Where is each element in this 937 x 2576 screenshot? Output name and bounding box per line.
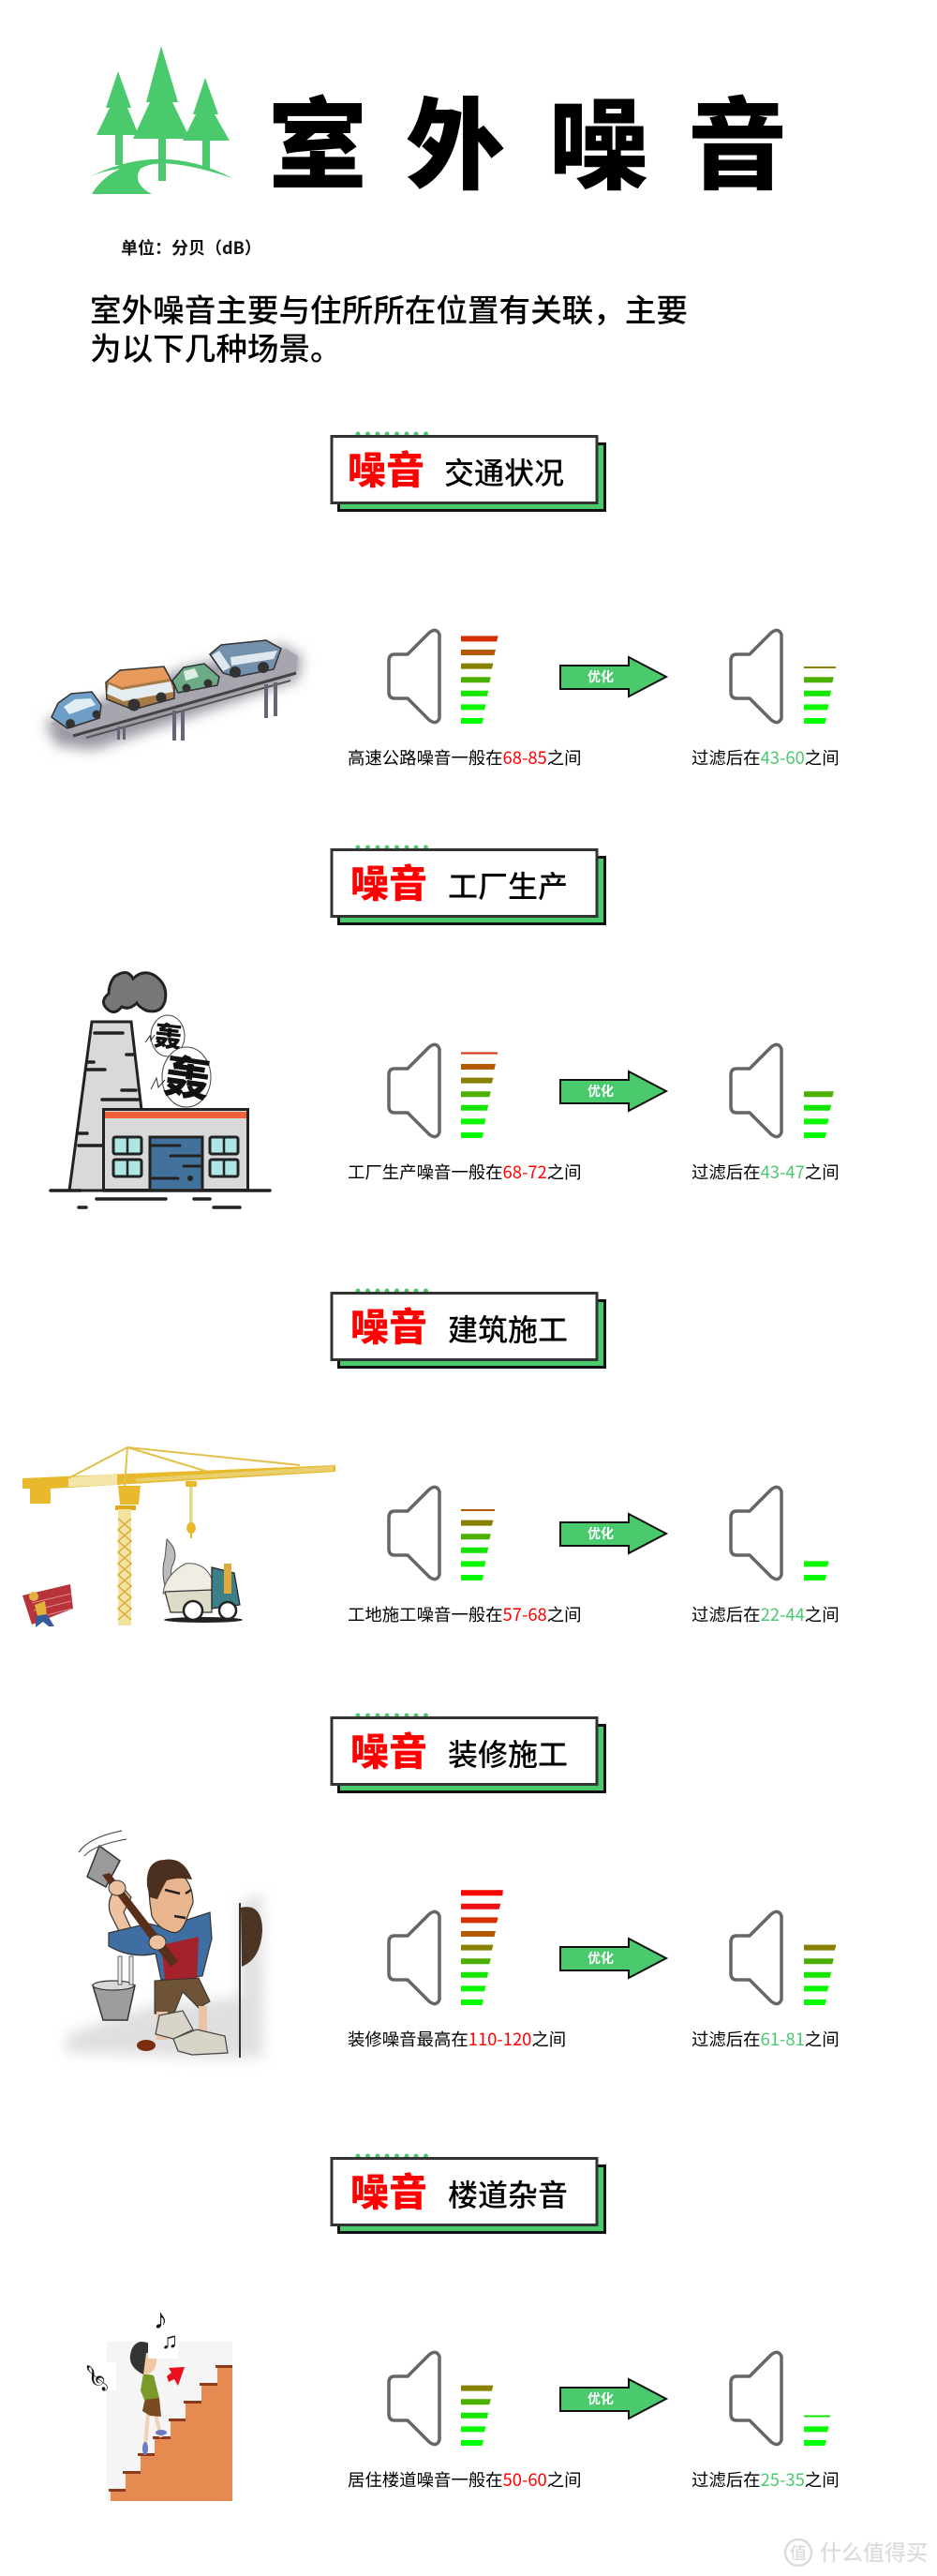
noise level bars: after	[804, 2415, 830, 2446]
vehicle: small blue car	[52, 692, 101, 728]
speaker icon: before	[389, 1044, 439, 1137]
heading banner: factory: 工厂生产	[448, 863, 568, 906]
speaker icon: after	[731, 1487, 781, 1580]
speaker icon: after	[731, 1911, 781, 2004]
music notes: ♫	[161, 2329, 178, 2354]
speaker icon: before	[389, 630, 439, 723]
speaker icon: before	[389, 1487, 439, 1580]
caption: after: 过滤后在22-44之间	[692, 1602, 840, 1626]
noise level bars: before	[461, 2386, 493, 2446]
intro paragraph: 室外噪音主要与住所所在位置有关联，主要	[90, 285, 688, 331]
speaker icon: after	[731, 1044, 781, 1137]
raised arm	[109, 1884, 133, 1933]
arrow: optimised: 优化	[587, 1949, 614, 1968]
heading banner: stairwell	[332, 2154, 605, 2233]
noise level bars: before	[461, 1509, 495, 1580]
logo: green trees on a hill	[89, 46, 232, 194]
arrow: optimised	[560, 1071, 666, 1111]
section: construction	[22, 1288, 840, 1627]
caption: after: 过滤后在43-60之间	[692, 745, 840, 770]
heading banner: renovation	[332, 1714, 605, 1792]
wall hole	[241, 1907, 262, 1967]
music notes	[80, 2304, 178, 2396]
arrow: optimised	[560, 1514, 666, 1553]
arrow: optimised: 优化	[587, 667, 614, 686]
caption: before: 工厂生产噪音一般在68-72之间	[348, 1160, 582, 1184]
noise level bars: after	[804, 666, 836, 724]
intro paragraph: 为以下几种场景。	[90, 323, 342, 369]
noise level bars: after	[804, 1091, 834, 1138]
speaker icon: before	[389, 2352, 439, 2445]
heading banner: traffic: 交通状况	[444, 450, 564, 493]
music notes: ♪	[154, 2304, 168, 2335]
section: factory	[51, 846, 840, 1207]
caption: before: 装修噪音最高在110-120之间	[348, 2027, 566, 2051]
worker and brick wall	[22, 1584, 73, 1627]
red arrow	[167, 2367, 185, 2386]
ground lines	[51, 1191, 270, 1207]
vest	[161, 1937, 199, 1981]
watermark: 值	[790, 2540, 807, 2565]
illustration: man hammering wall	[66, 1831, 263, 2058]
man	[109, 1859, 212, 2051]
child	[130, 2342, 167, 2455]
shorts	[155, 1978, 210, 2015]
vehicle: green car	[172, 664, 219, 693]
section: stairwell	[80, 2154, 840, 2501]
illustration: cars on elevated road	[45, 640, 302, 750]
vehicle: blue bus	[210, 640, 281, 678]
unit note: 单位：分贝（dB）	[121, 235, 261, 260]
rubble	[156, 2011, 228, 2055]
head	[148, 1870, 193, 1933]
smoke cloud	[103, 972, 166, 1012]
illustration: tower crane, brick worker and truck	[22, 1447, 335, 1627]
tower crane	[22, 1447, 335, 1625]
stairs	[111, 2367, 232, 2501]
illustration: child walking up stairs	[80, 2304, 232, 2501]
title: 室外噪音	[268, 66, 787, 210]
vehicle: orange bus	[106, 666, 174, 711]
caption: before: 高速公路噪音一般在68-85之间	[348, 745, 582, 770]
building	[103, 1110, 247, 1191]
caption: after: 过滤后在25-35之间	[692, 2467, 840, 2492]
noise level bars: before	[461, 636, 498, 724]
heading banner: construction: 噪音	[350, 1295, 427, 1352]
heading banner: renovation: 装修施工	[448, 1731, 568, 1775]
caption: before: 居住楼道噪音一般在50-60之间	[348, 2467, 582, 2492]
sound bubble: large: 轰	[161, 1039, 215, 1110]
heading banner: construction: 建筑施工	[448, 1307, 568, 1350]
shirt	[109, 1912, 212, 1980]
dump truck with rubble	[163, 1539, 243, 1623]
heading banner: traffic: 噪音	[348, 439, 424, 495]
music notes: 𝄞	[80, 2362, 112, 2396]
section: renovation	[66, 1714, 840, 2058]
arrow: optimised	[560, 1939, 666, 1978]
noise level bars: before	[461, 1890, 503, 2005]
bucket	[93, 1956, 135, 2020]
arrow: optimised	[560, 657, 666, 696]
caption: after: 过滤后在61-81之间	[692, 2027, 840, 2051]
heading banner: renovation: 噪音	[350, 1720, 427, 1776]
heading banner: traffic	[332, 431, 605, 510]
illustration: noisy factory	[51, 972, 270, 1207]
noise level bars: after	[804, 1945, 836, 2005]
heading banner: stairwell: 楼道杂音	[448, 2172, 568, 2215]
hammer	[79, 1831, 178, 1967]
sound bubble: small: 轰	[153, 1014, 184, 1056]
noise level bars: before	[461, 1052, 498, 1138]
watermark: 什么值得买	[820, 2535, 928, 2567]
caption: before: 工地施工噪音一般在57-68之间	[348, 1602, 582, 1626]
heading banner: stairwell: 噪音	[350, 2161, 427, 2217]
speaker icon: after	[731, 630, 781, 723]
arrow: optimised: 优化	[587, 1524, 614, 1543]
heading banner: construction	[332, 1288, 605, 1367]
arrow: optimised	[560, 2379, 666, 2419]
arrow: optimised: 优化	[587, 1082, 614, 1101]
heading banner: factory	[332, 846, 605, 924]
arrow: optimised: 优化	[587, 2389, 614, 2408]
section: traffic	[45, 431, 840, 770]
speaker icon: after	[731, 2352, 781, 2445]
speaker icon: before	[389, 1911, 439, 2004]
chimney	[69, 1022, 141, 1191]
noise level bars: after	[804, 1561, 829, 1580]
caption: after: 过滤后在43-47之间	[692, 1160, 840, 1184]
heading banner: factory: 噪音	[350, 852, 427, 908]
